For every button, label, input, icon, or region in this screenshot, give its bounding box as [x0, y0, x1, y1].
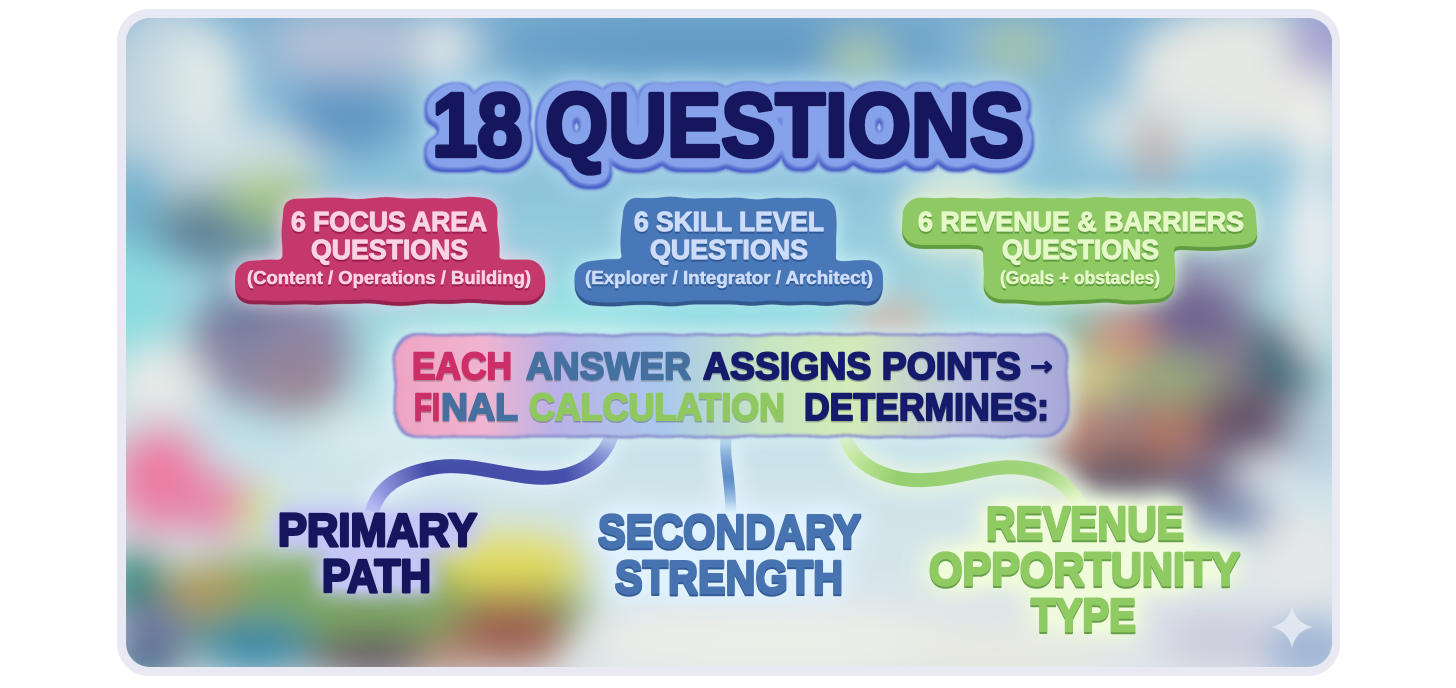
statement text: ANSWER [526, 346, 691, 388]
statement text [412, 346, 1053, 429]
badge text: QUESTIONS [1002, 234, 1159, 265]
outcome: primary path: PRIMARY [278, 504, 477, 556]
badge text [918, 206, 1244, 288]
statement text: ASSIGNS POINTS [703, 346, 1021, 388]
badge text [585, 206, 873, 288]
badge shape [575, 198, 883, 301]
statement text: NAL [441, 387, 518, 429]
badge text: 6 FOCUS AREA [291, 206, 487, 237]
badge text: QUESTIONS [650, 234, 808, 265]
outcome: revenue opportunity type: OPPORTUNITY [929, 543, 1240, 595]
badge: revenue and barriers questions [902, 198, 1257, 300]
statement text: → [1030, 352, 1053, 382]
statement text: EACH [412, 346, 512, 388]
outcome: secondary strength: SECONDARY [598, 505, 861, 557]
outcome: secondary strength: STRENGTH [615, 551, 843, 603]
panel box [396, 336, 1066, 435]
badge: skill level questions [575, 198, 883, 301]
badge text: QUESTIONS [311, 234, 468, 265]
badge text: 6 SKILL LEVEL [634, 206, 824, 237]
outcome: revenue opportunity type: TYPE [1031, 589, 1136, 641]
badge text: (Content / Operations / Building) [247, 268, 531, 288]
statement text: FI [414, 387, 440, 429]
outcome: revenue opportunity type [929, 497, 1240, 641]
badge: focus area questions [236, 198, 545, 301]
connector: primary path [372, 437, 611, 512]
outcome: revenue opportunity type: REVENUE [986, 497, 1184, 549]
statement text: DETERMINES: [804, 387, 1049, 429]
connector halo [372, 437, 1082, 518]
badge text [247, 206, 531, 288]
outcome: primary path [278, 504, 477, 602]
icon: sparkle watermark [1271, 606, 1313, 648]
connectors [372, 437, 1082, 518]
connector: revenue opportunity [846, 437, 1082, 510]
connector: secondary strength [726, 437, 731, 518]
badge shape [236, 198, 545, 301]
badge shape [902, 198, 1257, 300]
badge text: (Goals + obstacles) [1000, 268, 1160, 288]
badge text: 6 REVENUE & BARRIERS [918, 206, 1244, 237]
panel: calculation statement [385, 328, 1075, 444]
outcome: primary path: PATH [322, 550, 431, 602]
title: 18 QUESTIONS [432, 76, 1024, 176]
badge text: (Explorer / Integrator / Architect) [585, 268, 873, 288]
panel glow [385, 328, 1075, 444]
outcome: secondary strength [598, 505, 861, 603]
statement text: CALCULATION [529, 387, 785, 429]
